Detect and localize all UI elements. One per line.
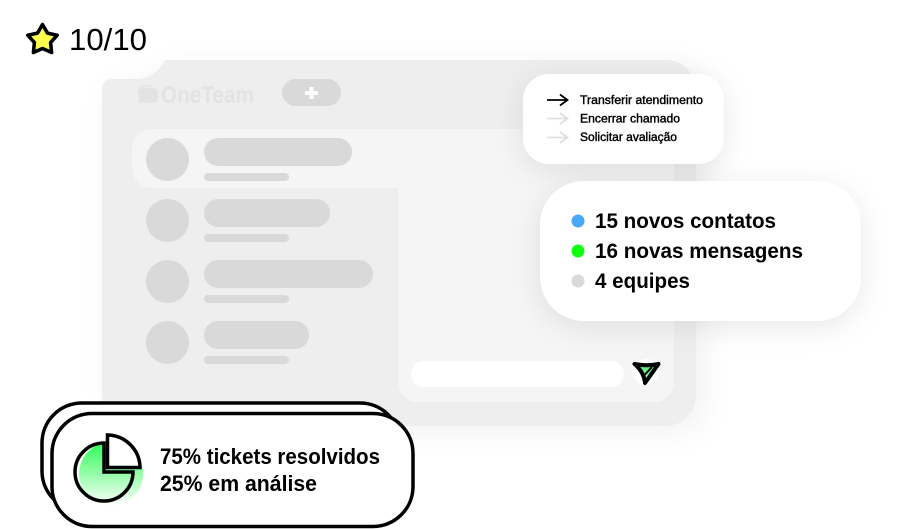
logo: OneTeam: OneTeam [161, 82, 254, 109]
contact row 2 [146, 199, 330, 242]
card front [52, 414, 413, 526]
stat: messages: 16 novas mensagens [595, 239, 803, 263]
contact row 3 [146, 260, 373, 303]
contact row 4 [146, 321, 309, 364]
dot: blue [572, 214, 584, 228]
arrow: active [547, 94, 568, 106]
menu item 2: Encerrar chamado [580, 114, 680, 126]
card back [42, 403, 400, 511]
arrow: inactive 2 [547, 132, 568, 143]
panel: stats [540, 181, 861, 321]
icon: pie chart [75, 435, 143, 506]
button: add [282, 79, 341, 106]
dot: gray [572, 274, 584, 288]
rating: 10/10 [28, 22, 147, 57]
stat: teams: 4 equipes [595, 269, 690, 293]
message input [411, 361, 624, 387]
text: in review: 25% em análise [160, 471, 317, 496]
panel: chat area [132, 129, 674, 402]
contact row 1 [146, 138, 352, 181]
menu item 1: Transferir atendimento [580, 95, 703, 107]
icon: star [28, 24, 57, 52]
panel: app window [102, 60, 696, 426]
icon: send [633, 359, 659, 385]
panel: actions menu [523, 74, 724, 164]
dot: green [572, 244, 584, 258]
text: resolved: 75% tickets resolvidos [160, 444, 380, 469]
stat: contacts: 15 novos contatos [595, 209, 776, 233]
panel: tickets card [42, 403, 413, 526]
rating text: 10/10 [69, 22, 147, 57]
menu item 3: Solicitar avaliação [580, 132, 677, 144]
arrow: inactive 1 [547, 113, 568, 124]
